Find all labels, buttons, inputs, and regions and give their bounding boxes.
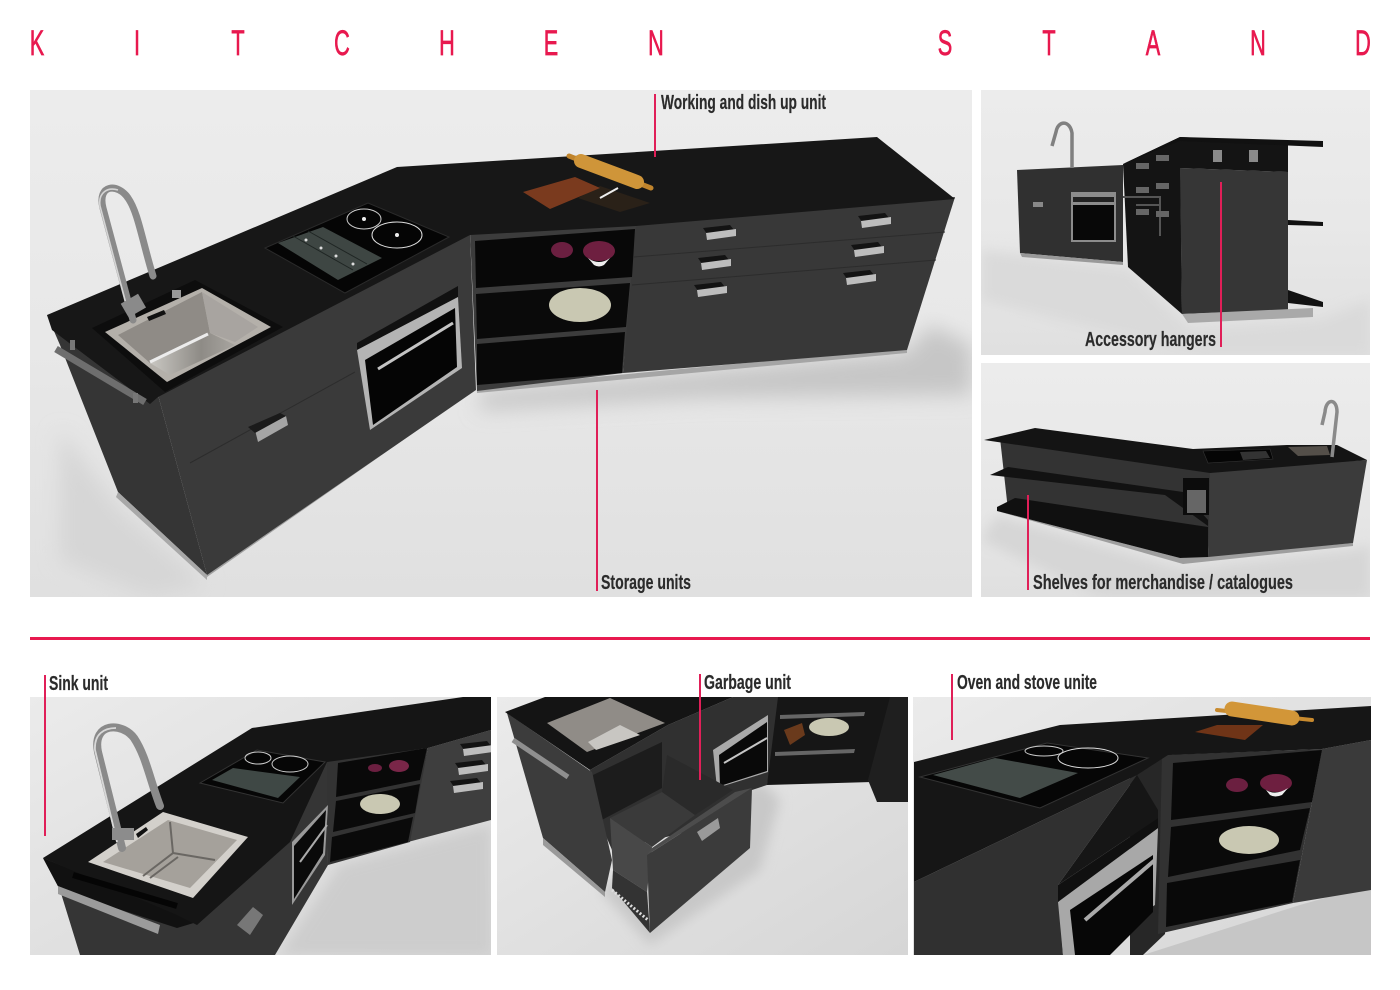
leader line: sink unit bbox=[44, 675, 46, 836]
title: N bbox=[648, 25, 664, 63]
leader line: shelves bbox=[1027, 495, 1029, 590]
cabinet handles bbox=[237, 741, 493, 935]
label: garbage unit: Garbage unit bbox=[704, 672, 791, 694]
lower shelf bbox=[997, 498, 1208, 558]
label: storage units: Storage units bbox=[601, 572, 691, 594]
label: accessory hangers: Accessory hangers bbox=[1085, 329, 1216, 351]
panel: sink unit bbox=[30, 697, 493, 955]
sink bbox=[547, 698, 665, 752]
towel bar bbox=[58, 875, 177, 934]
cabinet end face bbox=[47, 315, 207, 575]
faucet bbox=[1322, 402, 1337, 457]
panel: merchandise shelves view bbox=[981, 363, 1370, 597]
label: shelves: Shelves for merchandise / catalogues bbox=[1033, 572, 1293, 594]
cabinet end and side faces bbox=[43, 762, 328, 955]
cutting board and rolling pin bbox=[523, 156, 651, 212]
leader line: garbage unit bbox=[699, 674, 701, 780]
title bbox=[30, 25, 1371, 63]
storage shelves bbox=[470, 224, 636, 391]
leader line: oven unit bbox=[951, 674, 953, 740]
cabinet left front face bbox=[158, 233, 476, 575]
leader line: storage units bbox=[596, 390, 598, 591]
plate bbox=[549, 288, 611, 322]
oven bbox=[357, 286, 462, 430]
cutting board and rolling pin bbox=[1195, 709, 1312, 740]
panel: main kitchen stand render bbox=[30, 90, 972, 597]
right block bbox=[1208, 460, 1367, 557]
pull-out garbage drawer bbox=[610, 755, 752, 933]
leader line: accessory hangers bbox=[1220, 182, 1222, 347]
countertop bbox=[47, 137, 955, 404]
sink bbox=[92, 280, 283, 392]
cabinet right front with drawers bbox=[623, 197, 955, 373]
oven bbox=[1058, 818, 1158, 955]
oven bbox=[1071, 192, 1116, 242]
title: T bbox=[231, 25, 245, 63]
hob bbox=[920, 743, 1148, 808]
counter top bbox=[914, 706, 1371, 882]
upper body bbox=[590, 697, 778, 850]
towel bar bbox=[513, 740, 568, 777]
glossy corner body bbox=[1130, 752, 1172, 955]
catalogue niche bbox=[1183, 478, 1209, 515]
end face bbox=[507, 713, 612, 892]
title: E bbox=[544, 25, 558, 63]
far cabinet and door bbox=[767, 697, 892, 785]
glossy panel bbox=[1058, 775, 1158, 885]
faucet bbox=[95, 727, 160, 848]
faucet bbox=[1052, 123, 1072, 168]
hob bbox=[265, 203, 449, 293]
title: K bbox=[30, 25, 45, 63]
front face bbox=[914, 775, 1137, 955]
label: oven unit: Oven and stove unite bbox=[957, 672, 1097, 694]
title: A bbox=[1146, 25, 1161, 63]
right cabinet bbox=[1293, 740, 1371, 903]
sink-side block bbox=[1017, 165, 1123, 262]
hob and sink bbox=[1203, 446, 1330, 463]
counter top bbox=[1123, 137, 1323, 164]
oven bbox=[713, 715, 768, 788]
label: working unit: Working and dish up unit bbox=[661, 92, 826, 114]
title: T bbox=[1042, 25, 1056, 63]
counter top bbox=[505, 697, 733, 770]
title: D bbox=[1355, 25, 1371, 63]
towel bar bbox=[56, 340, 145, 403]
title: H bbox=[439, 25, 455, 63]
label: sink unit: Sink unit bbox=[49, 673, 108, 695]
panel: accessory hangers view bbox=[981, 90, 1370, 355]
counter top bbox=[43, 697, 491, 925]
title: I bbox=[134, 25, 140, 63]
hob bbox=[200, 750, 325, 803]
recess bbox=[593, 742, 662, 822]
back wing bbox=[1000, 438, 1212, 557]
storage shelves bbox=[1158, 749, 1322, 934]
open door interior bbox=[1123, 137, 1182, 314]
oven bbox=[292, 805, 328, 905]
title: N bbox=[1250, 25, 1266, 63]
hangers bbox=[1213, 150, 1258, 162]
panel: oven and stove unit bbox=[913, 697, 1371, 955]
drawer handles bbox=[694, 213, 891, 297]
main wing bbox=[1180, 168, 1288, 314]
divider bbox=[30, 637, 1370, 640]
shelves bbox=[1288, 220, 1323, 307]
right cabinet bbox=[408, 730, 491, 842]
leader line: working unit bbox=[654, 94, 656, 157]
handle: cabinet door bbox=[248, 413, 288, 442]
bowls bbox=[551, 241, 615, 266]
panel: garbage unit bbox=[497, 697, 908, 955]
faucet bbox=[100, 188, 181, 320]
counter top bbox=[984, 428, 1367, 473]
upper shelf bbox=[990, 467, 1208, 526]
title: C bbox=[334, 25, 350, 63]
title: S bbox=[938, 25, 952, 63]
sink bbox=[88, 812, 248, 898]
storage shelves bbox=[325, 748, 428, 865]
